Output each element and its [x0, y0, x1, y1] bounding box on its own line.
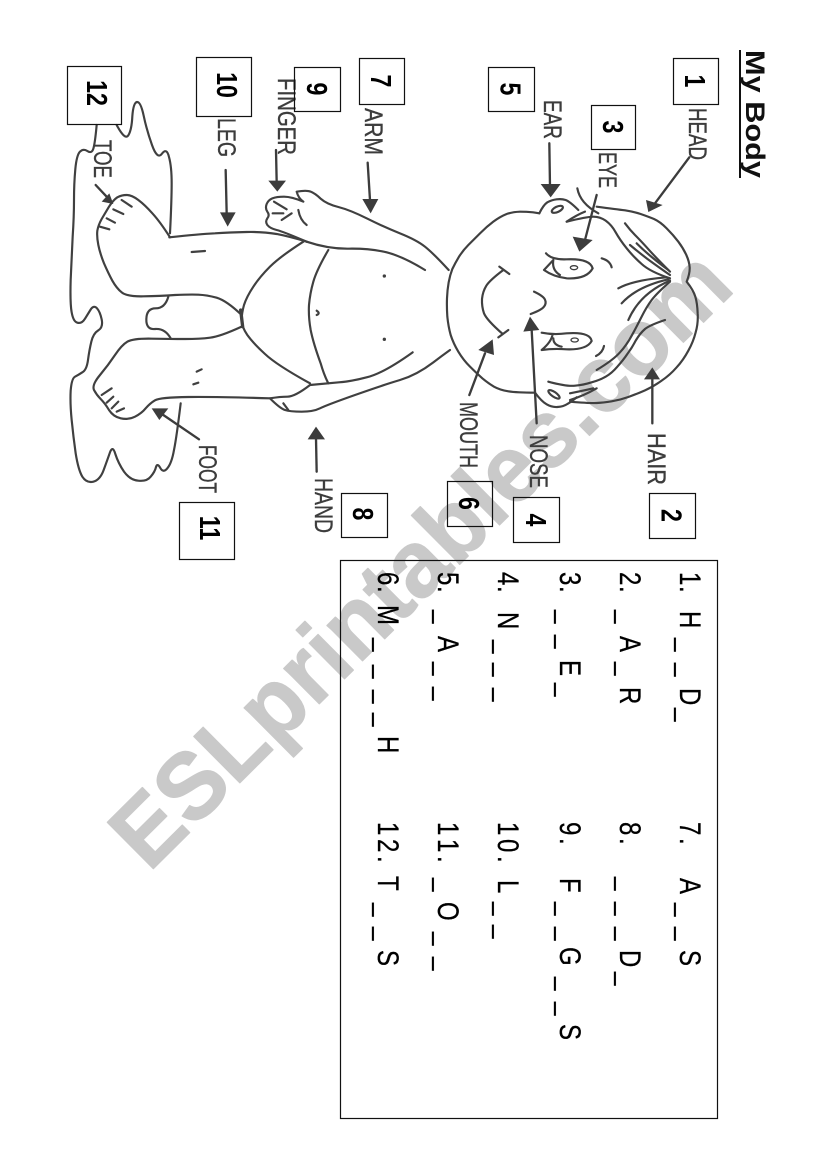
chest dots and navel	[317, 274, 386, 341]
leg and foot lower	[93, 327, 270, 419]
label: NOSE: NOSE	[524, 435, 552, 488]
answer 5 and 11	[431, 572, 466, 971]
answer 3 and 9	[553, 572, 588, 1040]
arrow to eye	[573, 195, 597, 252]
label: EYE: EYE	[593, 152, 621, 188]
answer 4 and 10	[491, 572, 526, 939]
answer 2 and 8: 2._A_R	[613, 572, 648, 704]
number box 1	[674, 58, 718, 104]
label: MOUTH: MOUTH	[454, 402, 482, 468]
number box 2: 2	[655, 509, 688, 522]
answer 4 and 10: 4.N___	[491, 572, 526, 702]
number box 10: 10	[210, 72, 244, 98]
number box 2	[650, 494, 696, 538]
label: ARM: ARM	[359, 108, 387, 155]
number box 12: 12	[80, 80, 114, 106]
answer 5 and 11: 5._A__	[431, 572, 466, 701]
mouth	[482, 267, 509, 337]
answer 2 and 8: 8.___D_	[613, 822, 648, 986]
answer 1 and 7	[673, 572, 708, 966]
answer 6 and 12: 12.T__S	[371, 822, 406, 966]
illustration: child's head	[447, 188, 698, 407]
label: EAR: EAR	[538, 100, 566, 139]
number box 8	[342, 494, 388, 538]
eye upper	[544, 253, 593, 278]
arrows: head section	[469, 143, 689, 423]
label: FINGER: FINGER	[272, 78, 300, 155]
number box 6	[448, 482, 492, 526]
answer panel	[340, 560, 718, 1118]
answer 4 and 10: 10.L__	[491, 822, 526, 939]
eyebrows	[596, 258, 612, 356]
arrow to foot	[152, 408, 199, 439]
answer 3 and 9: 9.F__G__S	[553, 822, 588, 1040]
answer 5 and 11: 11._O__	[431, 822, 466, 971]
lowered arm and hand	[270, 350, 450, 412]
number box 4	[514, 498, 560, 542]
label: TOE: TOE	[88, 140, 116, 178]
number box 10	[196, 58, 252, 116]
arrow to hand	[308, 427, 325, 472]
hairlines	[548, 217, 670, 386]
number box 11	[180, 502, 234, 560]
illustration: child's body and ground shadow	[70, 102, 450, 482]
answer 6 and 12	[371, 572, 406, 966]
number box 3: 3	[596, 121, 630, 133]
number box 6: 6	[452, 497, 486, 510]
arrow to ear	[541, 143, 561, 197]
ear bottom	[535, 388, 597, 407]
answer 2 and 8	[613, 572, 648, 986]
leg and foot upper	[97, 195, 242, 315]
label: FOOT: FOOT	[193, 445, 221, 493]
ear top	[539, 188, 598, 222]
arrow to head	[646, 157, 689, 212]
watermark: ESLprintables.com: ESLprintables.com	[89, 229, 751, 888]
briefs	[241, 242, 328, 383]
arrow to nose	[523, 317, 539, 423]
number box 5	[488, 68, 534, 112]
eye lower	[542, 333, 592, 350]
number box 7: 7	[364, 75, 398, 87]
toes upper	[100, 200, 205, 252]
arrow to finger	[268, 150, 286, 192]
arrows: body section	[96, 150, 378, 472]
number box 8: 8	[346, 508, 380, 520]
ground shadow outline	[70, 102, 181, 482]
raised arm and hand	[266, 191, 449, 270]
number box 5: 5	[494, 83, 527, 95]
arrow to toe	[96, 185, 113, 204]
number box 7	[360, 58, 404, 104]
number box 9	[294, 68, 340, 112]
number box 1: 1	[678, 75, 712, 87]
number box 12	[68, 66, 122, 124]
nose	[531, 292, 546, 314]
arrow to mouth	[469, 339, 494, 395]
number box 4: 4	[519, 514, 553, 527]
leg top	[169, 232, 307, 242]
number box 3	[592, 106, 636, 150]
arrow to leg	[220, 170, 236, 227]
hair outline	[570, 207, 698, 403]
arrow to hair	[644, 367, 660, 423]
label: HAIR: HAIR	[642, 433, 670, 485]
finger lines	[273, 202, 307, 225]
answer 3 and 9: 3.__E_	[553, 572, 588, 697]
label: HAND: HAND	[309, 478, 337, 533]
answer 1 and 7: 7.A__S	[673, 822, 708, 966]
title: My Body: My Body	[740, 50, 770, 178]
face outline	[447, 212, 539, 393]
number box 9: 9	[300, 83, 334, 95]
arrow to arm	[362, 163, 378, 213]
label: LEG: LEG	[212, 118, 240, 157]
answer 1 and 7: 1.H__D_	[673, 572, 708, 722]
answer 6 and 12: 6.M____H	[371, 572, 406, 753]
label: HEAD: HEAD	[683, 108, 711, 160]
number box 11: 11	[193, 516, 227, 540]
toes lower	[102, 369, 202, 412]
